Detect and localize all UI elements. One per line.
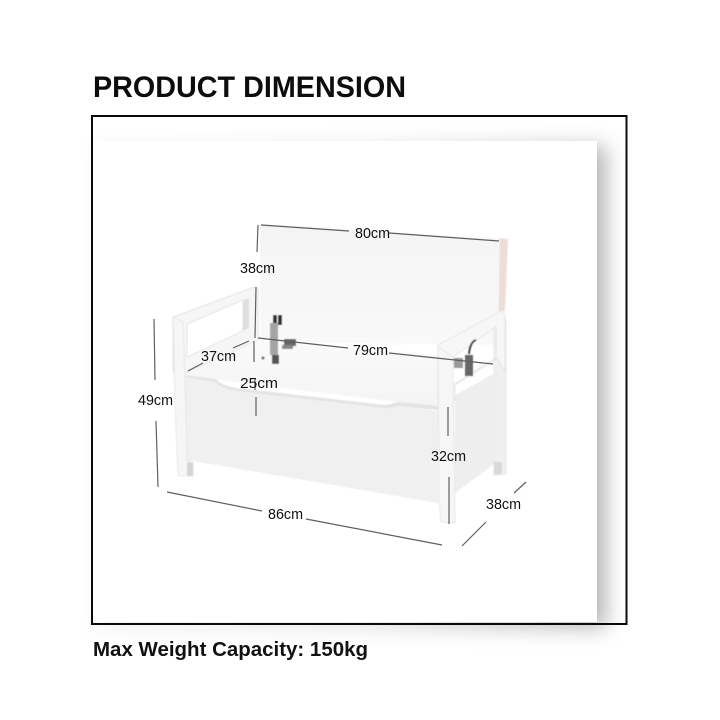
- right hinge: [454, 340, 476, 376]
- backrest lid: [260, 224, 500, 345]
- seat interior: [185, 340, 440, 407]
- left hinge: [261, 315, 296, 364]
- product panel shadow: [96, 146, 606, 628]
- right front post and leg: [438, 347, 455, 523]
- right side panel: [455, 372, 497, 493]
- dimension labels: 32cm: [431, 448, 466, 465]
- dimension labels: 37cm: [201, 348, 236, 365]
- dimension labels: 79cm: [353, 342, 388, 359]
- title: PRODUCT DIMENSION: [93, 71, 406, 104]
- weight capacity note: Max Weight Capacity: 150kg: [93, 639, 368, 661]
- left front post and leg: [173, 317, 193, 476]
- dimension labels: 38cm: [486, 496, 521, 513]
- front panel: [185, 377, 438, 503]
- front panel lip: [184, 375, 438, 410]
- left leg inner: [187, 462, 193, 476]
- backrest lid edge: [498, 238, 508, 312]
- dimension labels: 80cm: [355, 225, 390, 242]
- armrest inner shadow: [243, 298, 249, 331]
- rear right post and leg: [494, 312, 506, 475]
- dimension lines: [154, 225, 526, 546]
- dimension labels: 86cm: [268, 506, 303, 523]
- product panel frame: [92, 116, 626, 624]
- dimension labels: 38cm: [240, 260, 275, 277]
- right armrest: [438, 310, 505, 400]
- dimension labels: [138, 225, 521, 523]
- bench illustration: [173, 224, 508, 523]
- left armrest: [173, 287, 258, 372]
- rear leg inner: [494, 462, 502, 475]
- dimension labels: 25cm: [240, 375, 278, 392]
- dimension labels: 49cm: [138, 392, 173, 409]
- product photo panel: [93, 141, 597, 622]
